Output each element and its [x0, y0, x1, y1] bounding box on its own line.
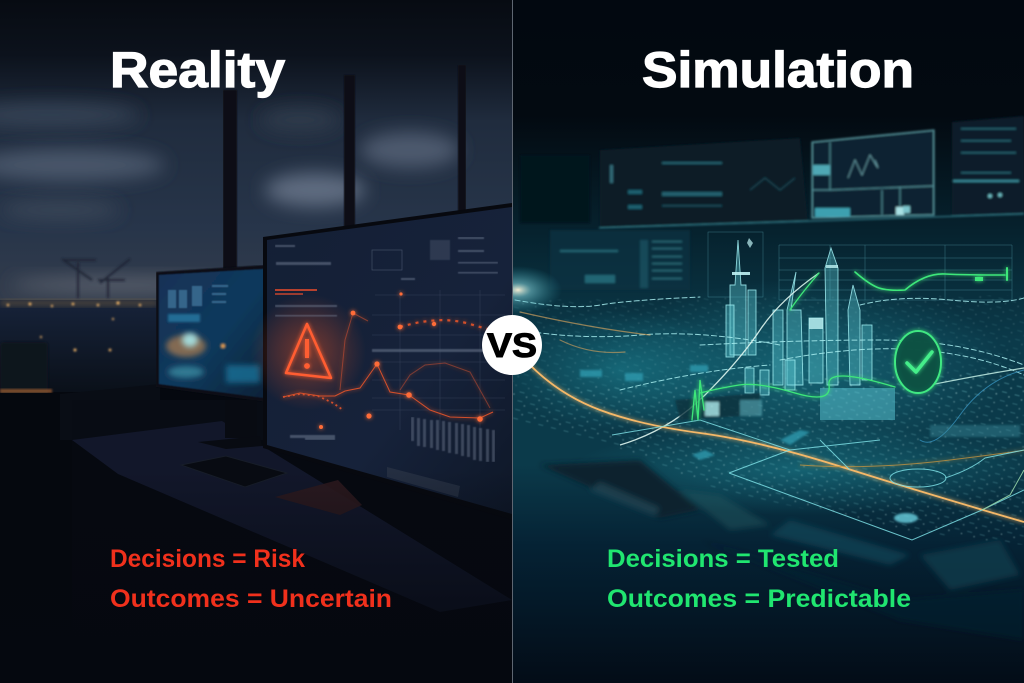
large monitor [250, 203, 512, 520]
title: Simulation: Simulation [642, 42, 914, 98]
light flare [513, 268, 558, 312]
VS badge [482, 315, 542, 375]
panel: simulation [513, 116, 1024, 682]
mid text panel [550, 230, 690, 290]
red line chart [283, 313, 500, 418]
rising white line [620, 273, 819, 445]
line: outcomes uncertain: Outcomes = Uncertain [110, 585, 392, 613]
circuit landscape [612, 420, 1024, 540]
upper dashboard panels [520, 116, 1024, 228]
background grid [708, 232, 1012, 300]
small monitor [156, 265, 266, 402]
text: Reality outcomes [110, 545, 392, 613]
holographic city [726, 240, 872, 395]
dashboard details [275, 237, 498, 440]
flowing data lines [515, 297, 1024, 442]
desk [72, 421, 512, 612]
green trend line [692, 268, 1007, 420]
stormy sky [0, 28, 512, 300]
keyboard [181, 456, 287, 487]
title: Reality: Reality [110, 42, 285, 98]
window mullions [223, 65, 466, 270]
teal background [513, 141, 1024, 682]
data texture [513, 295, 1024, 545]
bar chart [411, 417, 495, 462]
text: Simulation outcomes [607, 545, 911, 613]
paper [275, 480, 362, 515]
panel: reality [0, 28, 512, 612]
chart nodes [319, 292, 483, 429]
bottom darkening [267, 537, 512, 612]
data bars [820, 388, 895, 420]
night city horizon [0, 259, 160, 392]
glowing orange path [530, 365, 1024, 522]
VS badge: VS [487, 327, 537, 365]
bright city accents [732, 238, 838, 329]
warning triangle [286, 324, 331, 378]
line: decisions risk: Decisions = Risk [110, 545, 305, 573]
line: outcomes predictable: Outcomes = Predictable [607, 585, 911, 613]
line: decisions tested: Decisions = Tested [607, 545, 839, 573]
blurred foreground [540, 460, 1024, 640]
warning glow [255, 299, 361, 405]
left cabinet [0, 342, 54, 393]
monitor stand [198, 423, 262, 449]
circuit tiles [580, 365, 1020, 523]
divider [512, 0, 513, 683]
teal glows [524, 297, 984, 506]
check pin [890, 326, 946, 398]
